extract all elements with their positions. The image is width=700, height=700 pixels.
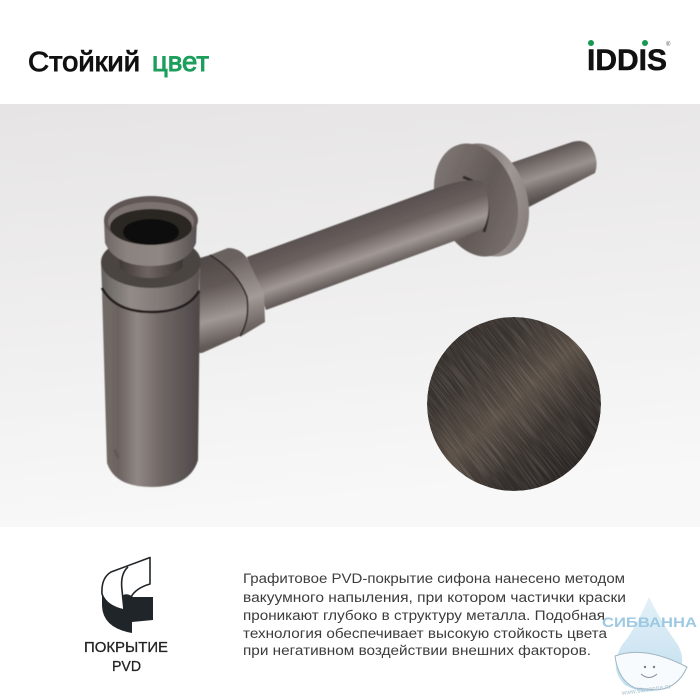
- photo panel: graphite siphon: [0, 104, 700, 514]
- watermark: Sibvanna: СИБВАННА: [602, 614, 697, 630]
- top cap: [104, 220, 197, 266]
- title: цвет: [152, 46, 209, 77]
- far pipe end: [505, 141, 597, 215]
- cap opening: [104, 196, 198, 245]
- lower collar: [101, 236, 201, 312]
- description text: при негативном воздействии внешних факторов.: [243, 643, 591, 659]
- watermark: Sibvanna: www.sibvanna.ru: [620, 683, 671, 697]
- description text: проникают глубоко в структуру металла. Подобная: [243, 608, 605, 624]
- vertical body: [102, 290, 200, 487]
- description text: Графитовое PVD-покрытие сифона нанесено методом: [243, 571, 625, 587]
- label: PVD coating: PVD: [112, 658, 141, 675]
- description text: [243, 571, 626, 659]
- siphon: [101, 132, 597, 487]
- horizontal pipe: [247, 180, 489, 310]
- description text: вакуумного напыления, при котором частички краски: [243, 590, 626, 606]
- title: [28, 46, 209, 77]
- pipe collar: [210, 248, 265, 337]
- logo: IDDIS: IDDIS: [587, 44, 667, 77]
- description text: технология обеспечивает высокую стойкость цвета: [243, 626, 607, 642]
- watermark: Sibvanna: [602, 597, 697, 697]
- logo: IDDIS: ®: [666, 41, 671, 48]
- label: PVD coating: [84, 639, 168, 675]
- groove: [102, 288, 199, 312]
- graphite finish swatch: [427, 317, 601, 491]
- neck: [118, 250, 184, 278]
- vertical body: iddis: [111, 448, 121, 461]
- elbow: [198, 255, 248, 353]
- icon: PVD coating: [102, 558, 153, 633]
- wall flange: [420, 132, 543, 268]
- label: PVD coating: ПОКРЫТИЕ: [84, 639, 168, 656]
- title: Стойкий: [28, 46, 140, 77]
